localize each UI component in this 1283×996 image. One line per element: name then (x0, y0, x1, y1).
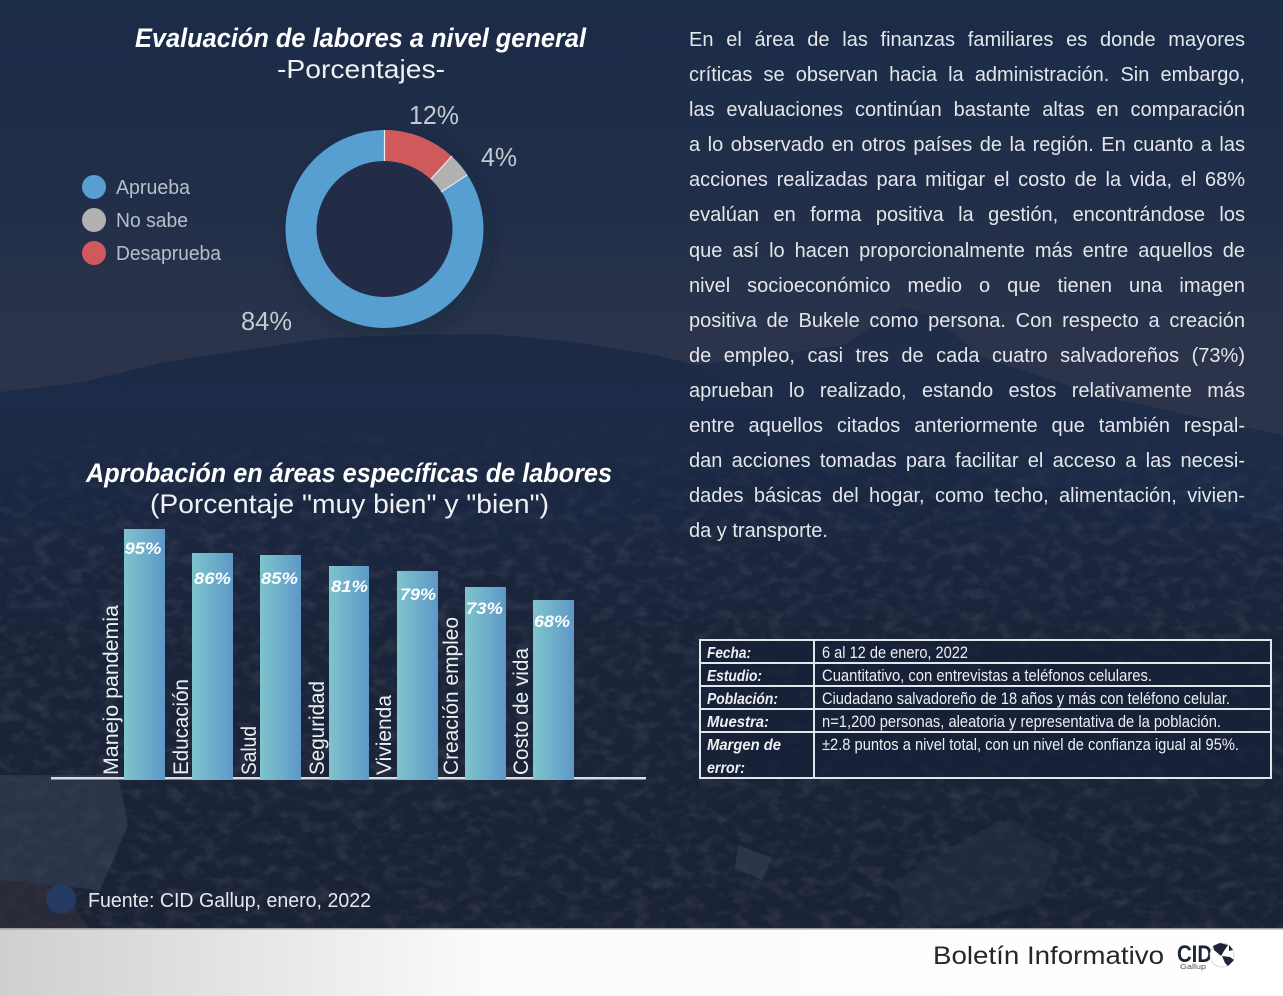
body text: evalúan en forma positiva la gestión, encontrándose los (689, 204, 1245, 226)
bar: Educación (170, 553, 233, 780)
bar: Vivienda: Vivienda (373, 695, 396, 775)
legend: Aprueba (116, 177, 191, 199)
bar: Costo de vida: 68% (534, 612, 570, 631)
bar: Seguridad: Seguridad (306, 681, 329, 775)
bar: Creación empleo: Creación empleo (440, 617, 463, 775)
body text: dades básicas del hogar, como techo, alimentación, vivien- (689, 485, 1245, 507)
bar: Seguridad: 81% (331, 577, 368, 596)
footer band (0, 928, 1283, 996)
body text: da y transporte. (689, 520, 828, 542)
donut labels: 4% (481, 142, 517, 172)
legend: No sabe (116, 210, 188, 232)
methodology table: Muestra: (707, 714, 769, 731)
title: aprobación por áreas (85, 458, 612, 519)
body text: críticas se observan hacia la administración. Sin embargo, (689, 64, 1245, 86)
background: city (0, 471, 1283, 928)
source: Fuente: CID Gallup, enero, 2022 (88, 890, 371, 912)
donut chart (300, 130, 480, 326)
body text: de empleo, casi tres de cada cuatro salvadoreños (73%) (689, 345, 1245, 367)
bar: Manejo pandemia (100, 529, 165, 780)
logo: CID Gallup (1177, 941, 1234, 971)
logo: CID Gallup: Gallup (1180, 964, 1206, 971)
bar: Manejo pandemia: Manejo pandemia (100, 605, 123, 775)
bar: Educación: 86% (194, 569, 231, 588)
methodology table: Fecha: (707, 645, 751, 662)
methodology table: Margen de (707, 737, 781, 754)
methodology table: Cuantitativo, con entrevistas a teléfonos celulares. (822, 666, 1152, 685)
footer band: Boletín Informativo (933, 942, 1164, 970)
methodology table: Población: (707, 691, 778, 708)
bar: Vivienda (373, 571, 438, 780)
bar: Creación empleo: 73% (466, 599, 503, 618)
bar: Seguridad (306, 566, 369, 780)
legend: Desaprueba (116, 243, 222, 265)
bar: Creación empleo (440, 587, 506, 780)
bar: Educación: Educación (170, 679, 193, 775)
title: evaluación general (135, 23, 586, 84)
bar: Salud: Salud (238, 726, 261, 775)
bar: Salud (238, 555, 301, 780)
donut labels: 84% (241, 306, 292, 336)
logo: CID Gallup: CID (1177, 941, 1212, 968)
body text: aprueban lo realizado, estando estos relativamente más (689, 380, 1245, 402)
title: evaluación general: -Porcentajes- (277, 54, 445, 84)
body text: En el área de las finanzas familiares es donde mayores (689, 29, 1245, 51)
methodology table: n=1,200 personas, aleatoria y representativa de la población. (822, 712, 1221, 731)
bar: Salud: 85% (261, 569, 298, 588)
methodology table: Ciudadano salvadoreño de 18 años y más con teléfono celular. (822, 689, 1230, 708)
background: far mountain (690, 306, 1283, 930)
methodology table: error: (707, 760, 745, 777)
body text (689, 29, 1245, 542)
donut labels (241, 100, 517, 336)
body text: entre aquellos citados anteriormente que también respal- (689, 415, 1245, 437)
donut labels: 12% (409, 100, 459, 130)
title: evaluación general: Evaluación de labores a nivel general (135, 23, 586, 53)
body text: que así lo hacen proporcionalmente más entre aquellos de (689, 240, 1245, 262)
body text: nivel socioeconómico medio o que tienen una imagen (689, 275, 1245, 297)
body text: dan acciones tomadas para facilitar el acceso a las necesi- (689, 450, 1245, 472)
methodology table: Estudio: (707, 668, 762, 685)
bar: Manejo pandemia: 95% (124, 539, 162, 558)
bar chart (51, 529, 646, 780)
bar: Costo de vida: Costo de vida (510, 648, 533, 775)
body text: las evaluaciones continúan bastante altas en comparación (689, 99, 1245, 121)
legend (82, 175, 222, 265)
methodology table: 6 al 12 de enero, 2022 (822, 643, 968, 662)
bar: Costo de vida (510, 600, 574, 780)
methodology table (700, 640, 1271, 778)
background: main mountain (0, 334, 1283, 930)
bar: Vivienda: 79% (400, 585, 436, 604)
body text: positiva de Bukele como persona. Con respecto a creación (689, 310, 1245, 332)
title: aprobación por áreas: (Porcentaje "muy bien" y "bien") (150, 489, 549, 519)
body text: a lo observado en otros países de la región. En cuanto a las (689, 134, 1245, 156)
body text: acciones realizadas para mitigar el costo de la vida, el 68% (689, 169, 1245, 191)
title: aprobación por áreas: Aprobación en áreas específicas de labores (85, 458, 612, 488)
